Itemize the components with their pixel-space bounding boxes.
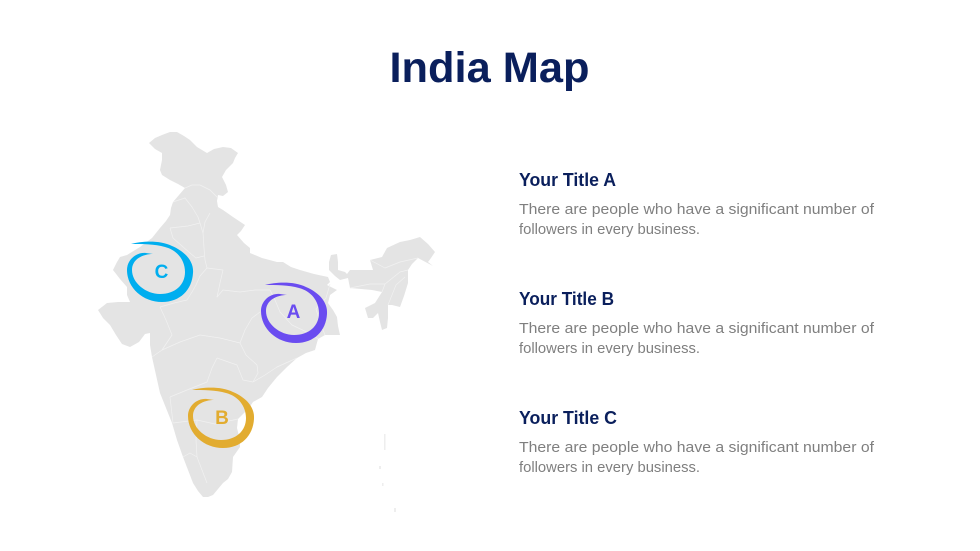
text block B: [519, 289, 875, 357]
marker A: [261, 283, 327, 343]
marker B: [188, 388, 254, 448]
swirl ring A: [261, 283, 327, 343]
body A: There are people who have a significant number of: [519, 201, 875, 218]
Andaman and Nicobar islands: [379, 434, 396, 512]
state borders: [152, 185, 418, 483]
text block A: [519, 170, 875, 238]
swirl ring B: [188, 388, 254, 448]
heading C: Your Title C: [519, 408, 617, 428]
northeast states: [329, 237, 435, 330]
letter B: B: [215, 408, 229, 429]
title: India Map: [390, 44, 590, 92]
heading B: Your Title B: [519, 289, 614, 309]
swirl ring C: [127, 242, 193, 302]
body C: There are people who have a significant number of: [519, 439, 875, 456]
body A: followers in every business.: [519, 221, 700, 238]
letter C: C: [155, 262, 169, 283]
letter A: A: [287, 302, 301, 323]
mainland landmass: [98, 132, 340, 497]
body C: followers in every business.: [519, 459, 700, 476]
heading A: Your Title A: [519, 170, 616, 190]
body B: There are people who have a significant number of: [519, 320, 875, 337]
map of India: [98, 132, 435, 512]
text block C: [519, 408, 875, 476]
marker C: [127, 242, 193, 302]
body B: followers in every business.: [519, 340, 700, 357]
